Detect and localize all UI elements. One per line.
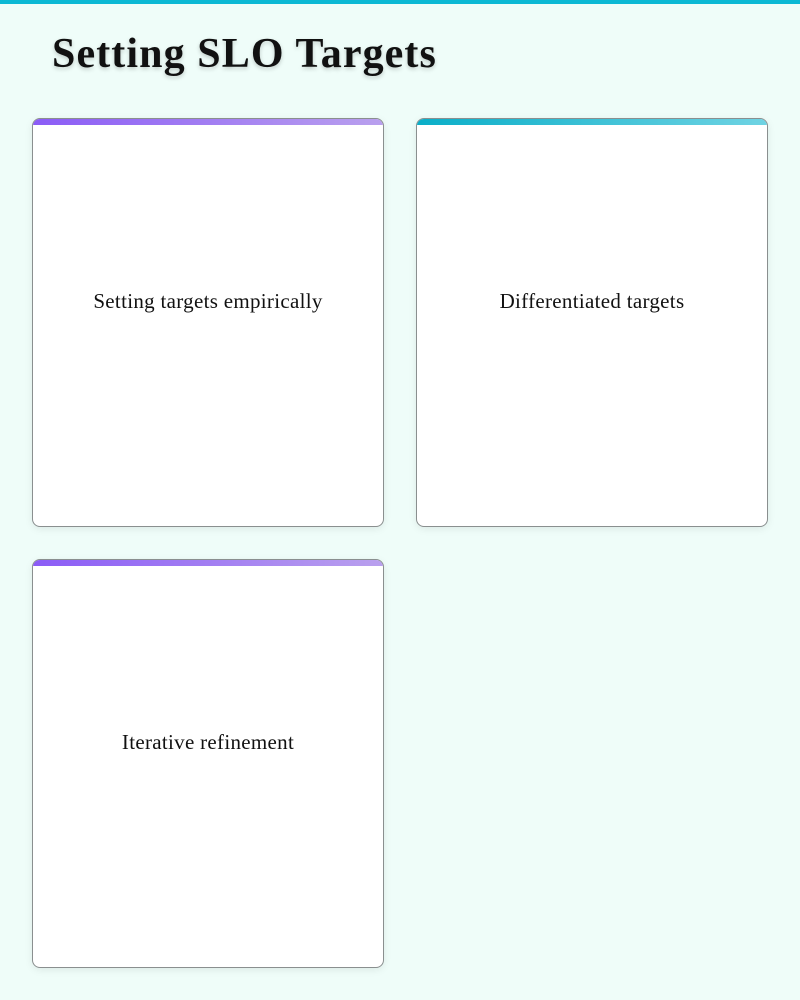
title: Setting SLO Targets [52, 31, 437, 77]
panel: differentiated targets [416, 118, 768, 527]
panel text: Iterative refinement [122, 730, 294, 754]
panel: setting targets empirically [32, 118, 384, 527]
panel text: Differentiated targets [500, 289, 684, 313]
panel text: Setting targets empirically [93, 289, 323, 313]
panel: iterative refinement [32, 559, 384, 968]
